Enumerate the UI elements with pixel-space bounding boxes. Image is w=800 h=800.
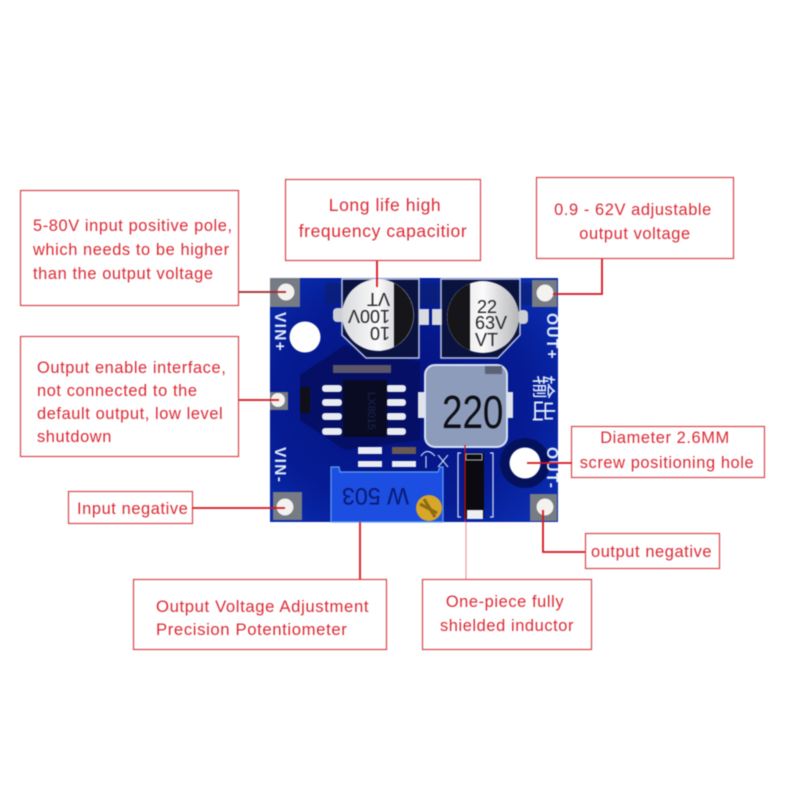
board silkscreen labels: OUT- — [543, 447, 560, 489]
callout: output enable: Output enable interface, — [37, 359, 226, 377]
callout: screw hole: Diameter 2.6MM — [600, 429, 730, 447]
IC chip LX8015: LX8015 — [365, 392, 377, 430]
capacitor 10uF 100V: 10 — [370, 323, 390, 343]
capacitor 10uF 100V: VT — [367, 289, 390, 309]
trimmer potentiometer — [331, 467, 443, 522]
capacitor 22uF 63V: VT — [475, 330, 498, 350]
trimmer potentiometer: W 503 — [342, 482, 409, 509]
diode — [458, 453, 493, 519]
callout: input positive pole — [20, 190, 286, 306]
inductor 220 — [418, 365, 513, 447]
callout: potentiometer — [134, 522, 386, 650]
IC chip LX8015 — [322, 380, 406, 437]
callout: output enable — [20, 336, 279, 456]
callout: adjustable output: 0.9 - 62V adjustable — [554, 201, 712, 219]
callout: inductor — [422, 445, 592, 650]
inductor 220: 220 — [442, 386, 503, 438]
callout: potentiometer: Precision Potentiometer — [156, 620, 347, 639]
circuit board — [270, 278, 560, 522]
capacitor 22uF 63V: 63V — [475, 313, 507, 333]
callout: input positive pole: which needs to be higher — [32, 241, 230, 259]
row of small components — [300, 365, 448, 468]
callout: output negative — [543, 510, 720, 568]
board silkscreen labels: 输出 — [529, 375, 556, 423]
callout: input positive pole: than the output voltage — [33, 265, 214, 283]
capacitor 22uF 63V — [432, 279, 528, 358]
capacitor 10uF 100V — [333, 279, 429, 358]
callout: inductor: One-piece fully — [446, 593, 564, 611]
callout: capacitor: frequency capacitior — [299, 221, 467, 241]
board silkscreen labels: VIN- — [271, 447, 288, 483]
callout: screw hole: screw positioning hole — [580, 454, 754, 472]
board silkscreen labels — [271, 312, 560, 489]
callout: output negative: output negative — [591, 543, 712, 561]
callout: adjustable output — [536, 178, 734, 294]
callout: input negative — [68, 492, 285, 524]
callout: input negative: Input negative — [77, 500, 188, 518]
callout: capacitor: Long life high — [329, 195, 441, 215]
callout: output enable: shutdown — [37, 428, 112, 446]
capacitor 10uF 100V: 100V — [348, 306, 390, 326]
callout: output enable: not connected to the — [37, 382, 198, 400]
callout: input positive pole: 5-80V input positive pole, — [33, 217, 233, 235]
callout: inductor: shielded inductor — [440, 617, 574, 635]
callout: screw hole — [527, 426, 764, 478]
callout: capacitor — [286, 180, 480, 287]
callout: potentiometer: Output Voltage Adjustment — [156, 597, 369, 616]
board silkscreen labels: OUT+ — [543, 313, 560, 360]
connection pads — [270, 278, 557, 521]
callout: adjustable output: output voltage — [579, 225, 691, 243]
capacitor 22uF 63V: 22 — [477, 297, 497, 317]
board silkscreen labels: VIN+ — [271, 312, 288, 352]
callout: output enable: default output, low level — [37, 405, 223, 423]
screw holes — [290, 322, 550, 488]
